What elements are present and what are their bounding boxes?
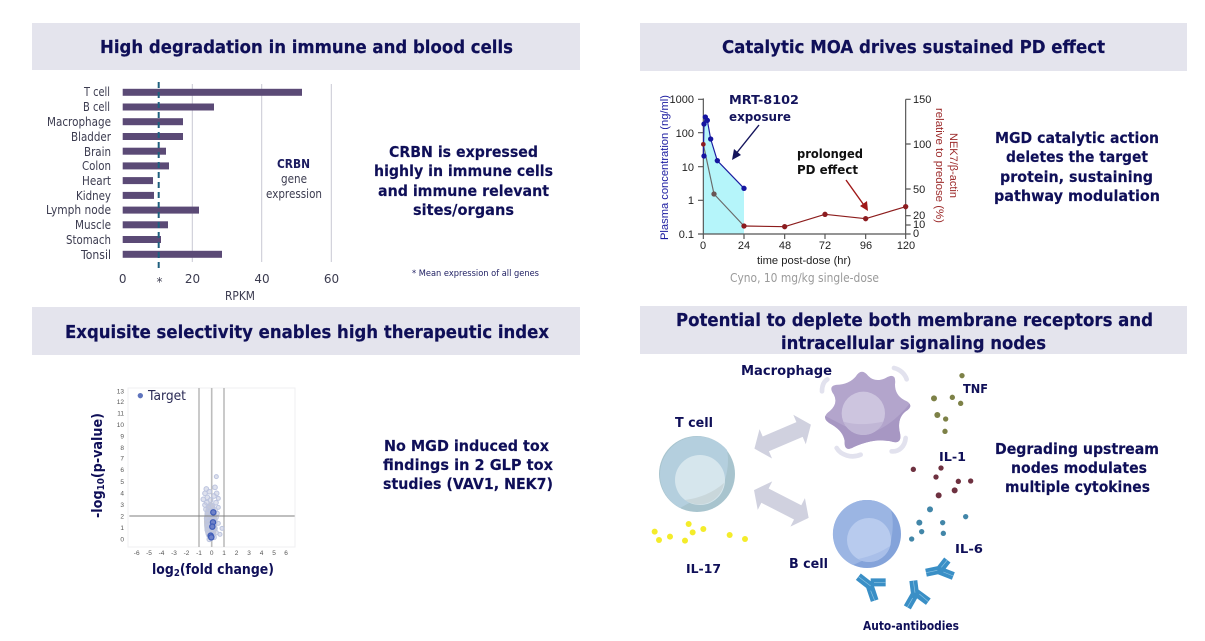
volcano plot: 0 bbox=[210, 550, 214, 557]
bar chart: CRBN gene expression: Tonsil bbox=[80, 248, 111, 262]
text block: degrading upstream nodes: Degrading upstream bbox=[995, 440, 1159, 458]
icon: B cell bbox=[833, 500, 901, 568]
panel: heading potential to deplete bbox=[640, 306, 1187, 354]
label: B cell: B cell bbox=[789, 557, 828, 572]
footnote: mean expression: * Mean expression of all genes bbox=[412, 269, 539, 279]
text block: no MGD induced tox: studies (VAV1, NEK7) bbox=[383, 475, 553, 493]
label: TNF: TNF bbox=[963, 382, 988, 396]
bar chart: CRBN gene expression: 40 bbox=[254, 272, 270, 286]
chart label: CRBN gene expression: gene bbox=[281, 172, 307, 186]
line chart: pharmacokinetics and PD: 1000 bbox=[670, 94, 694, 106]
bar chart: CRBN gene expression: Lymph node bbox=[46, 203, 111, 217]
volcano plot: 1 bbox=[222, 550, 226, 557]
volcano plot: 8 bbox=[120, 445, 124, 452]
text block: MGD catalytic action: pathway modulation bbox=[994, 187, 1160, 205]
volcano plot: 10 bbox=[117, 422, 124, 429]
volcano plot: -1 bbox=[196, 550, 202, 557]
bar chart: CRBN gene expression: RPKM bbox=[225, 289, 255, 303]
text block: CRBN description: highly in immune cells bbox=[374, 162, 553, 180]
callout: MRT-8102 exposure bbox=[729, 93, 799, 160]
bar chart: CRBN gene expression bbox=[46, 82, 339, 303]
text block: MGD catalytic action: deletes the target bbox=[1006, 148, 1148, 166]
text block: CRBN description bbox=[374, 143, 553, 219]
text block: MGD catalytic action: protein, sustaining bbox=[1000, 168, 1153, 186]
line chart: pharmacokinetics and PD: 1 bbox=[688, 195, 694, 207]
volcano plot: Target bbox=[147, 389, 186, 404]
line chart: pharmacokinetics and PD: 72 bbox=[819, 240, 831, 252]
icon group: IL-1 particles bbox=[911, 465, 973, 498]
bar chart: CRBN gene expression: T cell bbox=[83, 85, 110, 99]
volcano plot: 3 bbox=[120, 502, 124, 509]
volcano plot: 3 bbox=[247, 550, 251, 557]
label: IL-6: IL-6 bbox=[955, 542, 983, 556]
line chart: pharmacokinetics and PD: Cyno, 10 mg/kg single-dose bbox=[730, 271, 879, 285]
chart label: CRBN gene expression bbox=[266, 157, 322, 201]
text block: MGD catalytic action: MGD catalytic action bbox=[995, 129, 1159, 147]
line chart: pharmacokinetics and PD: 120 bbox=[897, 240, 915, 252]
volcano plot: 2 bbox=[174, 568, 180, 579]
line chart: pharmacokinetics and PD: NEK7/β-actin bbox=[947, 133, 959, 198]
bar chart: CRBN gene expression: Kidney bbox=[76, 189, 111, 203]
icon: T cell bbox=[659, 436, 735, 512]
bar chart: CRBN gene expression: Brain bbox=[84, 145, 111, 159]
callout: prolonged PD effect bbox=[797, 147, 868, 211]
panel: heading potential to deplete: intracellular signaling nodes bbox=[781, 333, 1046, 354]
volcano plot: 7 bbox=[120, 456, 124, 462]
label: auto-antibodies: Auto-antibodies bbox=[863, 619, 959, 633]
volcano plot: 6 bbox=[120, 467, 124, 474]
bar chart: CRBN gene expression: 0 bbox=[119, 272, 127, 286]
volcano plot: -5 bbox=[146, 550, 152, 557]
volcano plot: 2 bbox=[235, 550, 239, 557]
text block: MGD catalytic action bbox=[994, 129, 1160, 205]
callout: MRT-8102 exposure: MRT-8102 bbox=[729, 93, 799, 107]
bar chart: CRBN gene expression: Macrophage bbox=[47, 115, 111, 129]
bar chart: CRBN gene expression: 60 bbox=[324, 272, 339, 286]
volcano plot: 11 bbox=[117, 410, 124, 418]
volcano plot: -2 bbox=[184, 550, 190, 557]
text block: degrading upstream nodes bbox=[995, 440, 1159, 496]
arrow: T cell to macrophage bbox=[748, 410, 817, 463]
text block: CRBN description: sites/organs bbox=[413, 201, 514, 219]
line chart: pharmacokinetics and PD: 10 bbox=[682, 162, 694, 174]
bar chart: CRBN gene expression: 20 bbox=[185, 272, 200, 286]
volcano plot bbox=[90, 388, 295, 579]
icon group: IL-6 particles bbox=[909, 506, 968, 542]
volcano plot: (fold change) bbox=[180, 562, 274, 578]
volcano plot: 4 bbox=[260, 550, 264, 557]
volcano plot: 5 bbox=[120, 479, 124, 486]
bar chart: CRBN gene expression: Muscle bbox=[75, 218, 111, 232]
volcano plot: 10 bbox=[96, 478, 107, 490]
panel: heading exquisite selectivity: Exquisite selectivity enables high therapeutic index bbox=[65, 322, 549, 343]
text block: no MGD induced tox: No MGD induced tox bbox=[384, 437, 549, 455]
panel: heading potential to deplete: Potential to deplete both membrane receptors and bbox=[676, 310, 1153, 331]
text block: no MGD induced tox: findings in 2 GLP tox bbox=[383, 456, 553, 474]
volcano plot: -4 bbox=[159, 550, 165, 557]
volcano plot: 13 bbox=[117, 388, 124, 396]
bar chart: CRBN gene expression: B cell bbox=[83, 100, 110, 114]
bar chart: CRBN gene expression: Colon bbox=[82, 159, 111, 173]
label: IL-17: IL-17 bbox=[686, 562, 721, 576]
text block: degrading upstream nodes: nodes modulates bbox=[1011, 459, 1147, 477]
line chart: pharmacokinetics and PD: time post-dose (hr) bbox=[757, 255, 851, 267]
chart label: CRBN gene expression: CRBN bbox=[277, 157, 310, 171]
line chart: pharmacokinetics and PD: Plasma concentration (ng/ml) bbox=[659, 95, 671, 240]
panel: heading exquisite selectivity bbox=[32, 307, 580, 355]
bar chart: CRBN gene expression: * bbox=[156, 275, 162, 289]
volcano plot: -3 bbox=[171, 550, 177, 557]
panel: heading high degradation: High degradation in immune and blood cells bbox=[100, 37, 513, 58]
line chart: pharmacokinetics and PD: 0 bbox=[913, 228, 919, 240]
text block: no MGD induced tox bbox=[383, 437, 553, 493]
bar chart: CRBN gene expression: Stomach bbox=[66, 233, 111, 247]
arrow: T cell to B cell bbox=[747, 476, 816, 532]
icon group: IL-17 particles bbox=[652, 521, 748, 544]
bar chart: CRBN gene expression: Heart bbox=[82, 174, 111, 188]
volcano plot: 1 bbox=[120, 525, 124, 532]
label: T cell: T cell bbox=[675, 416, 713, 431]
line chart: pharmacokinetics and PD: 48 bbox=[779, 240, 791, 252]
chart label: CRBN gene expression: expression bbox=[266, 187, 322, 201]
line chart: pharmacokinetics and PD bbox=[659, 94, 959, 285]
line chart: pharmacokinetics and PD: 0 bbox=[700, 240, 706, 252]
line chart: pharmacokinetics and PD: 24 bbox=[738, 240, 750, 252]
volcano plot: 6 bbox=[284, 550, 288, 557]
text block: degrading upstream nodes: multiple cytokines bbox=[1005, 478, 1150, 496]
volcano plot: 0 bbox=[120, 536, 124, 544]
line chart: pharmacokinetics and PD: 20 bbox=[913, 210, 925, 222]
line chart: pharmacokinetics and PD: 50 bbox=[913, 184, 925, 196]
line chart: pharmacokinetics and PD: relative to predose (%) bbox=[933, 108, 945, 223]
line chart: pharmacokinetics and PD: 100 bbox=[913, 139, 931, 151]
text block: CRBN description: CRBN is expressed bbox=[389, 143, 538, 161]
volcano plot: 4 bbox=[120, 490, 124, 498]
icon group: TNF particles bbox=[931, 373, 965, 434]
text block: CRBN description: and immune relevant bbox=[378, 182, 549, 200]
label: macrophage: Macrophage bbox=[741, 364, 832, 379]
panel: heading catalytic MOA bbox=[640, 23, 1187, 71]
line chart: pharmacokinetics and PD: 100 bbox=[676, 128, 694, 140]
line chart: pharmacokinetics and PD: 0.1 bbox=[679, 229, 694, 241]
line chart: pharmacokinetics and PD: 150 bbox=[913, 94, 931, 106]
volcano plot: 2 bbox=[120, 514, 124, 520]
callout: MRT-8102 exposure: exposure bbox=[729, 110, 791, 124]
volcano plot: 9 bbox=[120, 434, 124, 440]
bar chart: CRBN gene expression: Bladder bbox=[71, 130, 111, 144]
panel: heading high degradation bbox=[32, 23, 580, 70]
volcano plot: 5 bbox=[272, 550, 276, 557]
line chart: pharmacokinetics and PD: 10 bbox=[913, 219, 925, 231]
volcano plot: -6 bbox=[134, 550, 140, 557]
line chart: pharmacokinetics and PD: 96 bbox=[860, 240, 872, 252]
icon: macrophage bbox=[820, 368, 917, 460]
volcano plot: 12 bbox=[117, 399, 124, 406]
volcano plot: -log bbox=[90, 487, 106, 518]
icon group: auto-antibodies bbox=[858, 560, 953, 607]
volcano plot: log bbox=[152, 562, 177, 578]
volcano plot: (p-value) bbox=[90, 413, 106, 478]
callout: prolonged PD effect: PD effect bbox=[797, 163, 858, 177]
panel: heading catalytic MOA: Catalytic MOA drives sustained PD effect bbox=[722, 37, 1105, 58]
callout: prolonged PD effect: prolonged bbox=[797, 147, 863, 161]
label: IL-1: IL-1 bbox=[939, 450, 966, 464]
